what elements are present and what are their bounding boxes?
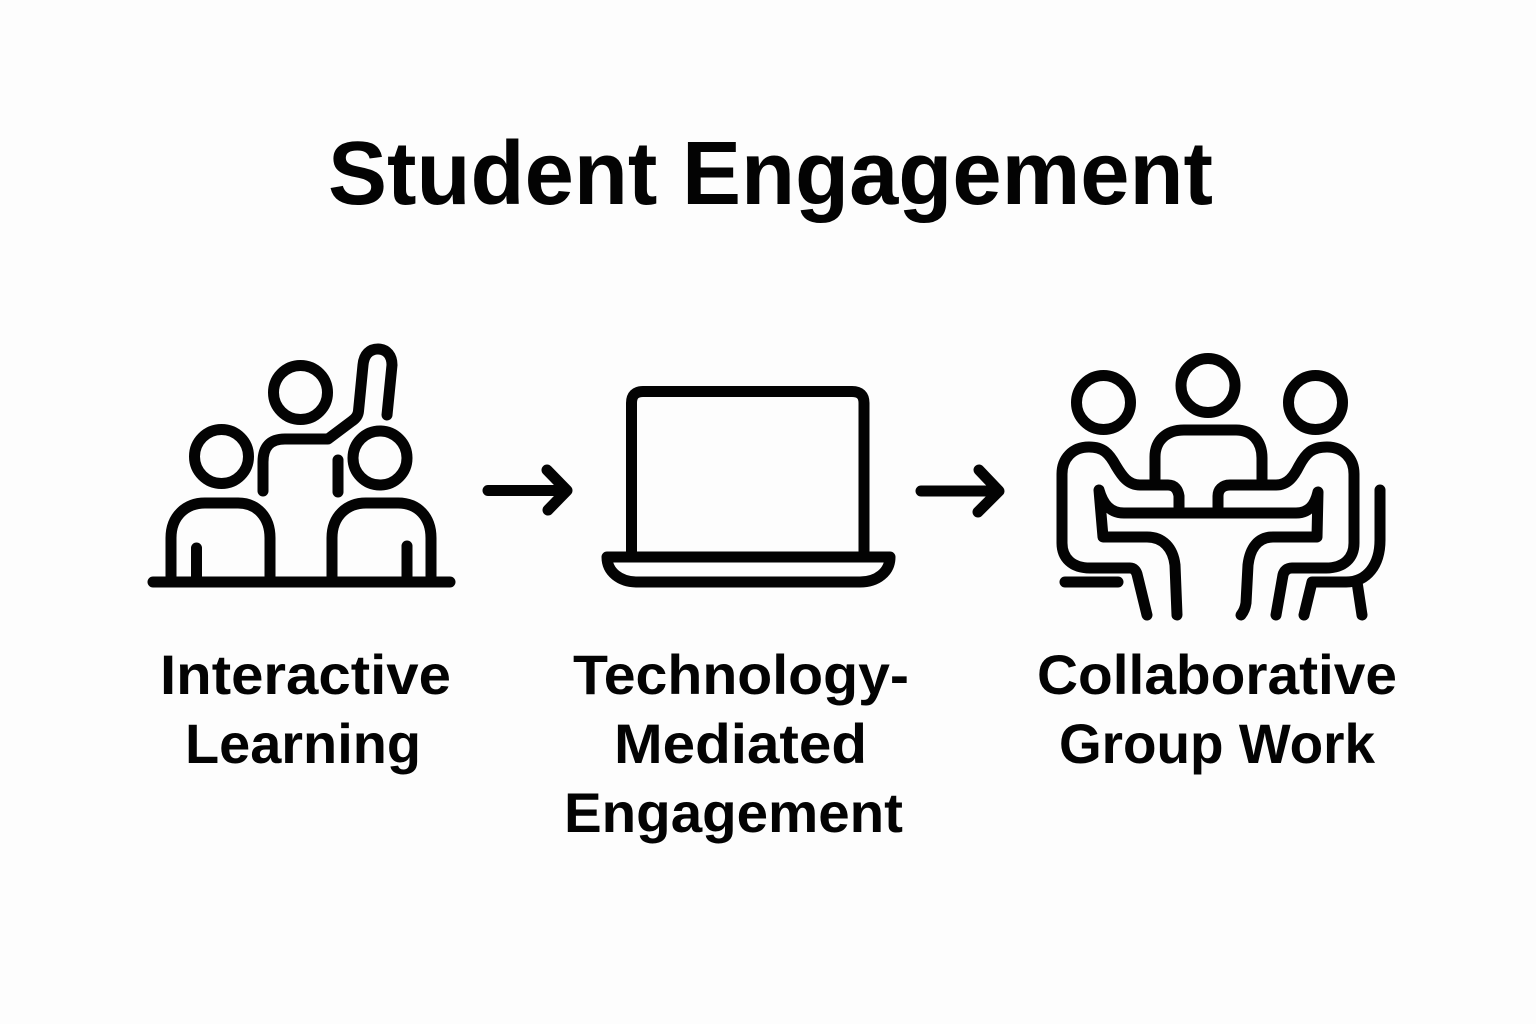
label: collaborative group work: Collaborative: [1037, 643, 1397, 706]
icon: laptop: [607, 392, 890, 582]
right person body: [1218, 447, 1354, 615]
arrow: technology to group work: [921, 470, 999, 512]
icon: collaborative group work: [1062, 358, 1380, 615]
label: collaborative group work: [1037, 643, 1397, 775]
right chair: [1304, 490, 1380, 615]
label: technology-mediated engagement: Engagement: [564, 781, 903, 844]
title: Student Engagement: [328, 124, 1213, 224]
label: technology-mediated engagement: [564, 643, 909, 844]
teacher body with raised arm: [263, 349, 392, 491]
icon: interactive learning: [153, 349, 450, 582]
arrow: interactive to technology: [488, 470, 567, 510]
right student body: [332, 503, 431, 578]
left chair: [1065, 576, 1118, 588]
left person head: [1076, 376, 1130, 430]
teacher head: [274, 366, 328, 420]
centre person body: [1155, 430, 1262, 480]
left student head: [194, 430, 248, 484]
right student arm: [402, 546, 412, 580]
teacher second arm: [332, 460, 344, 492]
label: interactive learning: Learning: [185, 712, 421, 775]
table line: [153, 576, 450, 588]
table: [1099, 490, 1318, 615]
label: collaborative group work: Group Work: [1059, 712, 1376, 775]
right student head: [353, 431, 407, 485]
label: interactive learning: Interactive: [160, 643, 451, 706]
label: technology-mediated engagement: Mediated: [614, 712, 867, 775]
laptop base: [607, 557, 890, 582]
left student body: [171, 503, 270, 578]
right person head: [1288, 376, 1342, 430]
laptop screen: [632, 392, 864, 555]
label: interactive learning: [160, 643, 451, 775]
left person body: [1062, 447, 1179, 615]
label: technology-mediated engagement: Technology-: [573, 643, 909, 706]
centre person head: [1181, 358, 1235, 412]
left student arm: [191, 548, 202, 580]
